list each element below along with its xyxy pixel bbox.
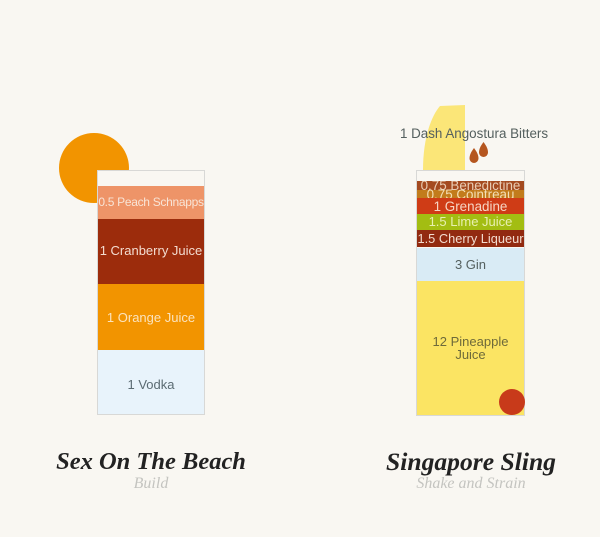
- layer: cranberry juice: [98, 219, 204, 284]
- layer: cointreau: 0.75 Cointreau: [427, 187, 514, 202]
- layer: cherry liqueur: 1.5 Cherry Liqueur: [418, 231, 524, 246]
- layer: cranberry juice: 1 Cranberry Juice: [100, 243, 202, 258]
- layer: orange juice: [98, 284, 204, 350]
- layer: gin: [417, 248, 524, 281]
- layer: pineapple juice: 12 Pineapple: [433, 334, 508, 349]
- glass: Singapore Sling: [416, 170, 525, 416]
- glass: Sex On The Beach: [97, 170, 205, 415]
- layer: vodka: [98, 350, 204, 414]
- icon: pineapple wedge garnish: [423, 105, 465, 170]
- layer: pineapple juice: [417, 281, 524, 415]
- subtitle: Shake and Strain: Shake and Strain: [416, 475, 526, 492]
- icon: bitters drops: [470, 142, 488, 163]
- label: angostura bitters: 1 Dash Angostura Bitters: [400, 126, 548, 141]
- layer: vodka: 1 Vodka: [128, 377, 174, 392]
- layer: lime juice: 1.5 Lime Juice: [429, 214, 512, 229]
- layer: pineapple juice: Juice: [455, 347, 486, 362]
- layer: peach schnapps: [98, 186, 204, 219]
- layer: cointreau: [417, 190, 524, 198]
- layer: orange juice: 1 Orange Juice: [107, 310, 195, 325]
- title: Sex On The Beach: Sex On The Beach: [56, 448, 246, 475]
- subtitle: Build: Build: [134, 475, 168, 492]
- icon: orange slice garnish: [59, 133, 129, 203]
- layer: peach schnapps: 0.5 Peach Schnapps: [98, 195, 204, 209]
- layer: grenadine: [417, 198, 524, 214]
- layer: gin: 3 Gin: [455, 257, 486, 272]
- icon: cherry garnish: [499, 389, 525, 415]
- layer: grenadine: 1 Grenadine: [434, 199, 507, 214]
- title: Singapore Sling: Singapore Sling: [386, 447, 556, 476]
